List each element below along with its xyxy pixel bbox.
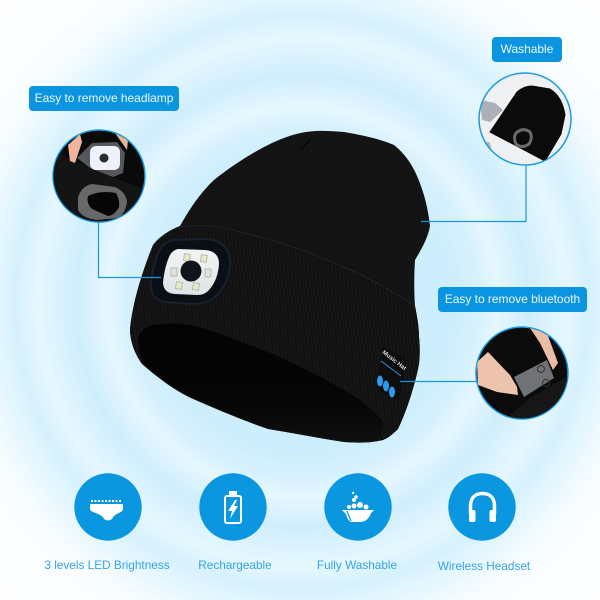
folded cuff — [130, 225, 420, 443]
label: easy to remove headlamp — [29, 86, 179, 111]
caption: 3 levels LED brightness: 3 levels LED Brightness — [44, 558, 170, 572]
detail circle: bluetooth removal — [476, 327, 570, 420]
headlamp LED panel — [163, 249, 219, 295]
headlamp housing — [151, 239, 230, 304]
bluetooth buttons — [377, 376, 395, 398]
label: easy to remove bluetooth — [438, 287, 587, 312]
hat inner opening — [138, 324, 383, 442]
music patch label: Music Hat — [381, 350, 407, 372]
hat crown and body — [130, 131, 430, 443]
caption: wireless headset: Wireless Headset — [438, 559, 530, 573]
label: easy to remove headlamp: Easy to remove headlamp — [35, 91, 173, 105]
headlamp button — [180, 260, 202, 282]
caption: rechargeable: Rechargeable — [198, 558, 272, 572]
detail circle: headlamp removal — [52, 129, 146, 223]
icon: LED brightness — [74, 473, 142, 541]
caption: fully washable: Fully Washable — [317, 558, 397, 572]
LED lights — [171, 254, 211, 290]
label: washable: Washable — [501, 42, 553, 56]
icon: battery — [199, 473, 267, 541]
music patch label — [376, 347, 407, 402]
label: washable — [492, 37, 562, 62]
label: easy to remove bluetooth: Easy to remove bluetooth — [445, 292, 580, 306]
connector lines — [98, 166, 526, 382]
crown dent — [301, 140, 310, 149]
beanie hat — [130, 131, 430, 443]
detail circle: washable — [479, 73, 571, 165]
icon: headphones — [448, 473, 516, 541]
icon: washing bowl — [324, 473, 392, 541]
cuff fold line — [180, 226, 415, 306]
